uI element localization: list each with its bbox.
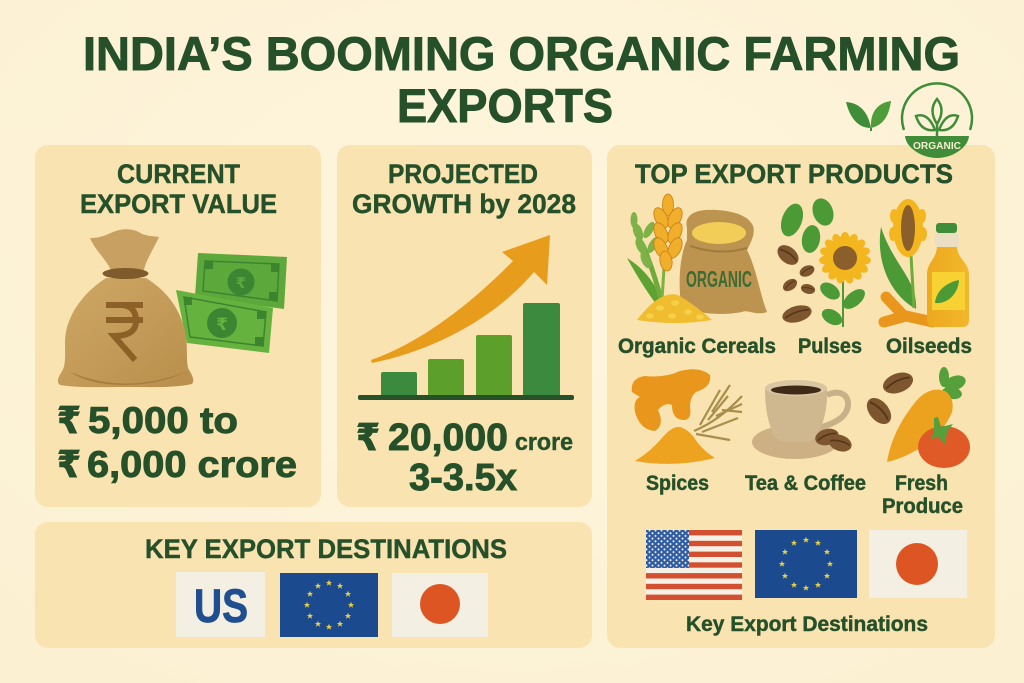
label: pulses: Pulses bbox=[798, 335, 862, 358]
flag: Japan bbox=[392, 573, 488, 637]
bar chart bbox=[358, 303, 574, 400]
arrow: growth trend bbox=[371, 235, 550, 363]
flag: EU bbox=[755, 530, 857, 598]
flag: Japan bbox=[869, 530, 967, 598]
heading: top export products: TOP EXPORT PRODUCTS bbox=[635, 159, 953, 189]
heading: current export value: CURRENT bbox=[117, 159, 240, 189]
heading: projected growth by 2028: PROJECTED bbox=[388, 159, 538, 189]
panel: current export value bbox=[35, 145, 321, 507]
label: organic cereals: Organic Cereals bbox=[618, 335, 776, 358]
value: 5,000 to 6,000 crore: 5,000 to bbox=[88, 400, 238, 441]
icon: organic cereals bbox=[627, 194, 767, 323]
flag card: US bbox=[176, 572, 265, 637]
icon: organic badge bbox=[902, 83, 972, 158]
value: 20,000 crore, 3-3.5x: 20,000 bbox=[388, 417, 508, 459]
label: spices: Spices bbox=[646, 472, 709, 495]
icon: fresh produce bbox=[862, 367, 970, 468]
label: tea and coffee: Tea & Coffee bbox=[745, 472, 866, 495]
heading: key export destinations: KEY EXPORT DESTINATIONS bbox=[145, 534, 507, 564]
icon: money bag bbox=[58, 229, 193, 387]
panel: projected growth bbox=[337, 145, 592, 507]
value: 5,000 to 6,000 crore bbox=[57, 400, 297, 485]
value: 5,000 to 6,000 crore: 6,000 crore bbox=[87, 444, 297, 485]
label: oilseeds: Oilseeds bbox=[886, 335, 972, 358]
flag: US bbox=[646, 530, 742, 600]
icon: organic badge: ORGANIC bbox=[913, 141, 961, 152]
icon: leaf pair bbox=[846, 101, 891, 131]
icon: organic cereals: ORGANIC bbox=[686, 266, 752, 292]
heading: projected growth by 2028 bbox=[352, 159, 576, 219]
icon: tea and coffee bbox=[752, 380, 854, 459]
heading: current export value bbox=[80, 159, 277, 219]
icon: banknotes: ₹ bbox=[236, 275, 246, 292]
icon: spices bbox=[632, 369, 742, 464]
icon: banknotes bbox=[176, 253, 287, 353]
value: 20,000 crore, 3-3.5x: ₹ bbox=[356, 417, 380, 458]
title: EXPORTS bbox=[397, 79, 613, 132]
label: fresh produce bbox=[882, 472, 963, 518]
icon: oilseeds bbox=[880, 199, 969, 327]
label: key export destinations: Key Export Destinations bbox=[686, 613, 928, 636]
value: 20,000 crore, 3-3.5x bbox=[356, 417, 573, 499]
panel: key export destinations bbox=[35, 522, 592, 648]
label: fresh produce: Fresh bbox=[895, 472, 948, 495]
heading: current export value: EXPORT VALUE bbox=[80, 189, 277, 219]
title: INDIA’S BOOMING ORGANIC FARMING bbox=[83, 27, 960, 80]
value: 5,000 to 6,000 crore: ₹ bbox=[57, 444, 81, 485]
value: 5,000 to 6,000 crore: ₹ bbox=[57, 400, 81, 441]
panel: top export products bbox=[607, 145, 995, 648]
icon: pulses bbox=[774, 195, 871, 329]
heading: projected growth by 2028: GROWTH by 2028 bbox=[352, 189, 576, 219]
value: 20,000 crore, 3-3.5x: crore bbox=[515, 429, 573, 456]
flag: EU bbox=[280, 573, 378, 637]
title bbox=[83, 27, 960, 132]
icon: banknotes: ₹ bbox=[216, 315, 228, 334]
value: 20,000 crore, 3-3.5x: 3-3.5x bbox=[409, 457, 517, 499]
flag card: US: US bbox=[194, 579, 248, 632]
label: fresh produce: Produce bbox=[882, 495, 963, 518]
